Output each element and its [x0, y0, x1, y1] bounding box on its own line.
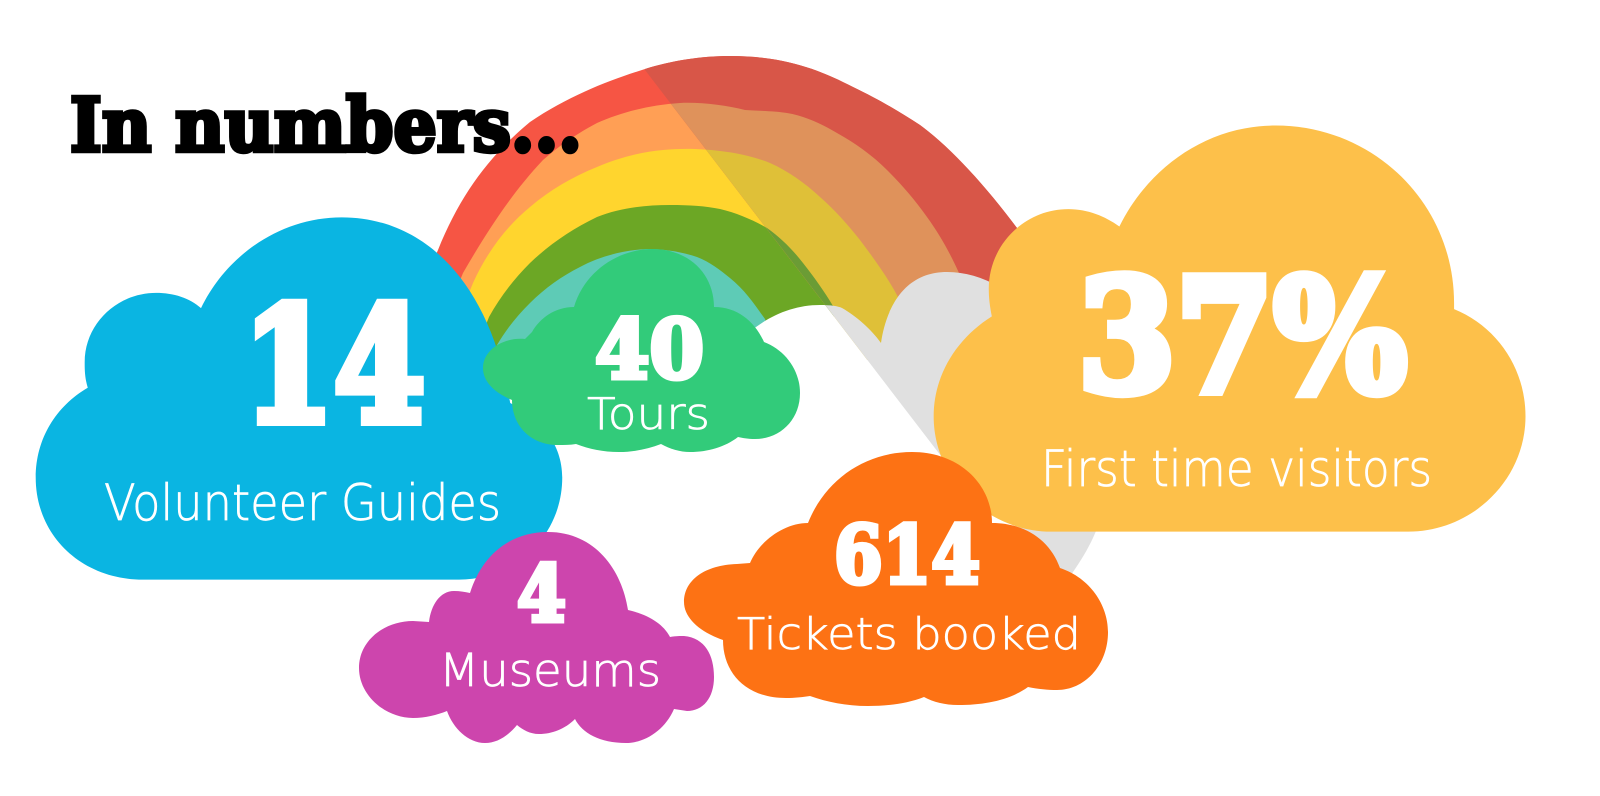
label: tours: Tours	[587, 389, 710, 440]
label: tickets booked: Tickets booked	[737, 609, 1081, 660]
panel: volunteer guides cloud	[36, 217, 562, 580]
panel: first time visitors cloud	[934, 126, 1525, 532]
cloud shape: magenta	[359, 532, 714, 743]
cloud shape: yellow	[934, 126, 1525, 532]
rainbow bands, shaded side	[645, 56, 1096, 573]
panel: museums cloud	[359, 532, 714, 743]
cloud shape: green	[483, 249, 800, 452]
label: volunteer guides: Volunteer Guides	[104, 474, 501, 532]
title: In numbers...	[70, 83, 582, 169]
panel: tickets booked cloud	[684, 452, 1108, 706]
label: first time visitors: First time visitors	[1041, 440, 1432, 498]
cloud shape: blue	[36, 217, 562, 580]
rainbow	[420, 56, 1110, 600]
number: 614: 614	[834, 508, 980, 602]
number: 37%: 37%	[1078, 245, 1407, 428]
number: 40: 40	[595, 303, 704, 398]
number: 14: 14	[243, 274, 425, 459]
cloud shape: orange	[684, 452, 1108, 706]
label: museums: Museums	[439, 644, 661, 697]
panel: tours cloud	[483, 249, 800, 452]
rainbow bands, lit side	[420, 56, 1110, 600]
number: 4: 4	[517, 549, 566, 640]
